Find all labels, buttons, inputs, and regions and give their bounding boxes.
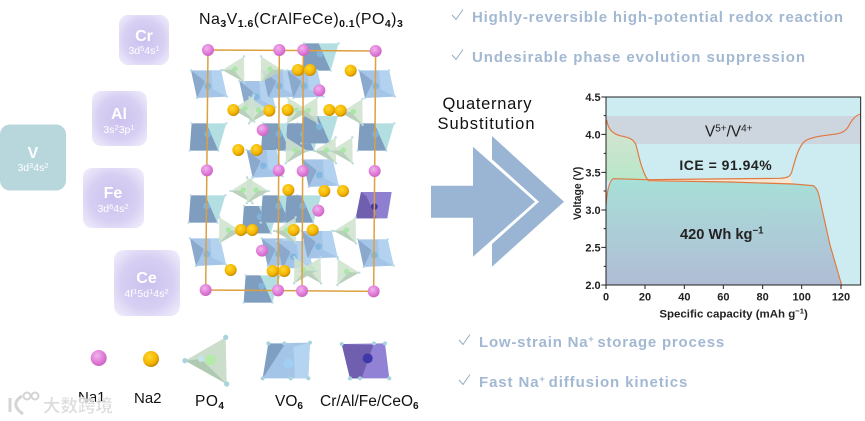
legend: Cr/Al/Fe/CeO6 — [320, 341, 419, 412]
V5+/V4+ band — [606, 116, 861, 144]
legend — [78, 335, 419, 412]
title: chemical formula: 3 — [397, 18, 403, 30]
element card: Al: Al — [111, 106, 127, 123]
y tick labels: 4.0 — [585, 129, 601, 141]
element card: Ce: 4s — [153, 288, 164, 300]
gap between curves — [648, 177, 793, 184]
element card: Ce: 4f — [124, 288, 133, 300]
watermark logo — [10, 392, 38, 414]
element card: Al: 3s — [103, 124, 115, 136]
title: chemical formula: 0.1 — [339, 18, 355, 30]
element card: Ce: 1 — [149, 287, 153, 296]
legend: Cr/Al/Fe/CeO6: 6 — [413, 401, 419, 412]
element card: V: 4s — [33, 162, 44, 174]
legend: Na2: Na2 — [134, 390, 162, 407]
purple substituted octahedron — [356, 192, 392, 218]
element card: Cr: 4s — [144, 45, 155, 57]
legend: Na1 — [78, 350, 107, 406]
y tick labels: 2.5 — [585, 242, 601, 254]
annotation: energy density: 420 Wh kg — [680, 227, 752, 243]
x tick labels: 0 — [603, 291, 609, 303]
element card: Cr — [119, 15, 169, 65]
voltage-capacity chart — [572, 92, 861, 321]
watermark: 大数跨境 — [43, 393, 113, 418]
x tick labels: 40 — [678, 291, 690, 303]
annotation: ICE: ICE = 91.94% — [679, 157, 772, 173]
title: chemical formula: 3 — [220, 18, 227, 30]
benefit list: bottom: diffusion kinetics — [549, 374, 688, 391]
element card: Ce: Ce — [136, 270, 157, 287]
element card: Fe — [83, 168, 144, 228]
element card: Al: 1 — [130, 123, 135, 132]
y tick labels — [585, 92, 601, 292]
legend: VO6 — [261, 341, 312, 412]
element card: Fe: 2 — [124, 202, 129, 211]
check icon — [452, 50, 463, 60]
legend: Na1: Na1 — [78, 389, 106, 406]
legend: VO6: 6 — [297, 401, 303, 412]
x axis title: ) — [804, 309, 808, 321]
x tick labels: 80 — [757, 291, 769, 303]
legend: PO4: 4 — [218, 401, 224, 412]
annotation: redox couple: V — [705, 124, 715, 141]
check icon — [459, 334, 470, 344]
title: chemical formula: (PO — [355, 11, 385, 28]
element card: V — [0, 124, 66, 190]
octahedra — [187, 42, 396, 304]
title: chemical formula: 1.6 — [238, 18, 254, 30]
element card: Ce: 5d — [137, 288, 149, 300]
y tick labels: 3.0 — [585, 205, 601, 217]
benefit list: top: Highly-reversible high-potential redox reaction — [472, 9, 843, 26]
discharge area fill — [606, 179, 842, 285]
element card: Cr: Cr — [135, 28, 153, 45]
y axis title: Voltage (V) — [572, 166, 584, 220]
element card: V: 2 — [44, 161, 49, 170]
Na2 atoms — [225, 64, 357, 277]
x tick labels: 20 — [639, 291, 651, 303]
charge region fill — [606, 120, 648, 181]
arrow heading: Quaternary Substitution — [438, 95, 534, 133]
title: chemical formula: (CrAlFeCe) — [254, 11, 339, 28]
benefit list: bottom: storage process — [597, 334, 725, 351]
element card: V: V — [28, 145, 39, 162]
element card: Al: 2 — [115, 123, 119, 132]
charge and discharge curves — [606, 114, 861, 285]
y tick labels: 4.5 — [585, 92, 601, 104]
element card: Al — [92, 91, 147, 146]
element card: Ce: 1 — [133, 287, 137, 296]
legend: Cr/Al/Fe/CeO6: Cr/Al/Fe/CeO — [320, 393, 413, 410]
benefit list: bottom: + — [540, 374, 546, 384]
y tick labels: 3.5 — [585, 167, 601, 179]
Na1 atoms — [200, 44, 382, 297]
element card: Cr: 5 — [140, 44, 144, 53]
element card: Al: 3p — [119, 124, 131, 136]
element card: Fe: 3d — [97, 203, 109, 215]
arrow: substitution — [431, 136, 564, 267]
title: chemical formula: ) — [391, 11, 397, 28]
legend: VO6: VO — [275, 393, 297, 410]
unit cell frame — [206, 50, 376, 291]
benefit list: bottom: Fast Na — [479, 374, 540, 391]
tetrahedra — [218, 55, 364, 286]
benefit list: bottom: + — [588, 334, 594, 344]
title: chemical formula: V — [227, 11, 238, 28]
element card: Ce — [114, 250, 180, 316]
benefit list: bottom: Low-strain Na — [479, 334, 588, 351]
benefit list: top: Undesirable phase evolution suppression — [472, 49, 805, 66]
title: chemical formula: 4 — [385, 18, 391, 30]
x tick labels: 60 — [717, 291, 729, 303]
benefit list: bottom — [459, 334, 725, 391]
element card: Fe: 6 — [109, 202, 113, 211]
annotation: energy density: −1 — [752, 226, 764, 237]
arrow heading: Quaternary Substitution: Quaternary — [442, 95, 532, 113]
check icon — [459, 374, 470, 384]
legend: Na2 — [134, 351, 162, 407]
element card: V: 3d — [17, 162, 29, 174]
axes — [601, 97, 861, 289]
x axis title: Specific capacity (mAh g — [659, 309, 795, 321]
watermark — [10, 392, 113, 418]
element card: Cr: 3d — [128, 45, 140, 57]
element card: V: 3 — [29, 161, 33, 170]
arrow heading: Quaternary Substitution: Substitution — [438, 115, 534, 133]
crystal structure — [187, 42, 396, 304]
element card: Cr: 1 — [155, 44, 160, 53]
plot background — [606, 97, 861, 285]
y tick labels: 2.0 — [585, 280, 601, 292]
x tick labels: 120 — [832, 291, 850, 303]
x tick labels — [603, 291, 850, 303]
x tick labels: 100 — [793, 291, 811, 303]
annotation: redox couple: 5+ — [715, 124, 727, 135]
benefit list: top — [452, 9, 843, 66]
x axis title: −1 — [795, 307, 805, 316]
element card: Fe: 4s — [113, 203, 124, 215]
check icon — [452, 10, 463, 20]
element card: Fe: Fe — [104, 185, 122, 202]
title: chemical formula: Na — [199, 11, 220, 28]
legend: PO4 — [182, 335, 229, 412]
legend: PO4: PO — [195, 393, 218, 410]
annotation: redox couple: /V — [727, 124, 742, 141]
annotation: redox couple: 4+ — [741, 124, 753, 135]
element card: Ce: 2 — [164, 287, 169, 296]
